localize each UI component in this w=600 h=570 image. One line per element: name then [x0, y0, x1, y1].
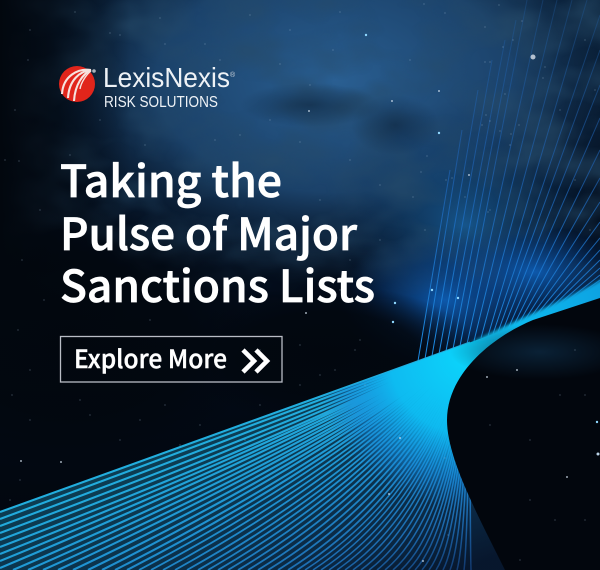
dark planet region	[447, 294, 600, 570]
icon: double chevron arrow	[243, 350, 267, 372]
band glow	[300, 274, 600, 520]
button: Explore More	[60, 336, 282, 382]
background: night sky nebula	[20, 0, 600, 357]
lower line fan	[0, 300, 600, 570]
logo: LexisNexis Risk Solutions	[59, 62, 236, 111]
logo icon: red globe	[59, 66, 96, 102]
registered mark: ®	[230, 71, 236, 79]
upper line fan	[418, 0, 600, 361]
title: Sanctions Lists	[60, 251, 375, 315]
button label: Explore More	[74, 340, 227, 376]
logo wordmark: LexisNexis	[103, 62, 230, 93]
title: Taking the	[60, 146, 282, 210]
band underfill	[0, 300, 600, 570]
logo tagline: RISK SOLUTIONS	[104, 94, 218, 111]
title	[60, 146, 375, 315]
title: Pulse of Major	[60, 199, 358, 263]
